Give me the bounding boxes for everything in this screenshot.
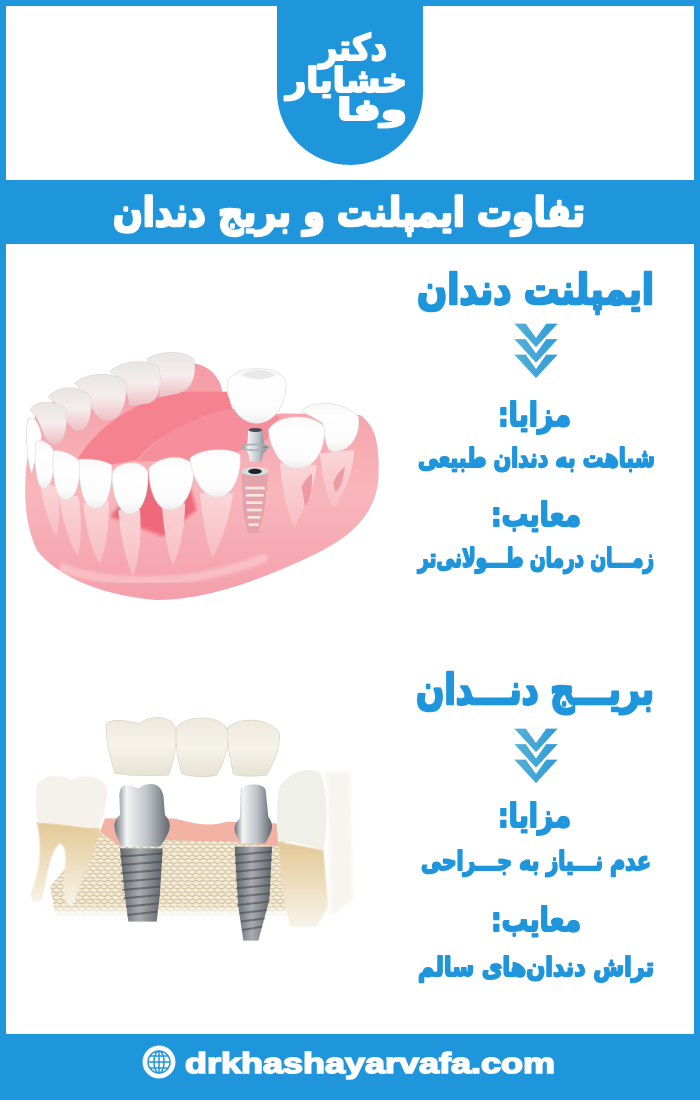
right tooth — [278, 842, 328, 927]
section: dental implant — [417, 265, 655, 574]
left tooth — [31, 822, 100, 905]
logo text: doctor: دکتر — [317, 28, 387, 69]
heading: advantages: مزایا: — [498, 796, 571, 836]
left implant screw — [120, 848, 163, 922]
gum highlight — [60, 557, 267, 581]
bone — [50, 832, 290, 920]
front teeth — [35, 403, 359, 514]
mouth floor — [78, 392, 233, 467]
title band — [0, 180, 700, 244]
text: disadvantage: تراش دندان‌های سالم — [418, 953, 654, 983]
illustration: dental implant in lower jaw — [25, 352, 379, 600]
icon: globe — [142, 1046, 176, 1078]
left implant abutment — [114, 784, 170, 847]
roots — [40, 450, 354, 575]
section: dental bridge — [416, 665, 654, 983]
footer band — [0, 1034, 700, 1100]
gum — [100, 818, 278, 847]
back teeth — [27, 352, 195, 473]
implant screw — [242, 473, 268, 533]
heading: disadvantages: معایب: — [491, 495, 581, 534]
crown — [227, 369, 286, 423]
illustration: dental bridge on two implants — [31, 717, 353, 941]
icon: triple chevron down — [513, 323, 559, 379]
logo text: vafa: وفا — [337, 93, 407, 128]
gum back — [25, 363, 379, 600]
website address: drkhashayarvafa.com — [185, 1048, 555, 1080]
logo badge — [277, 0, 423, 165]
icon: triple chevron down — [513, 728, 559, 784]
title: تفاوت ایمپلنت و بریج دندان — [113, 190, 585, 236]
abutment — [242, 429, 269, 462]
heading: disadvantages: معایب: — [491, 900, 581, 939]
logo text: khashayar: خشایار — [284, 61, 407, 101]
heading: dental implant: ایمپلنت دندان — [417, 265, 654, 315]
bridge crowns — [106, 717, 279, 777]
right implant abutment — [235, 784, 272, 843]
right implant screw — [235, 847, 272, 941]
heading: advantages: مزایا: — [498, 395, 571, 435]
